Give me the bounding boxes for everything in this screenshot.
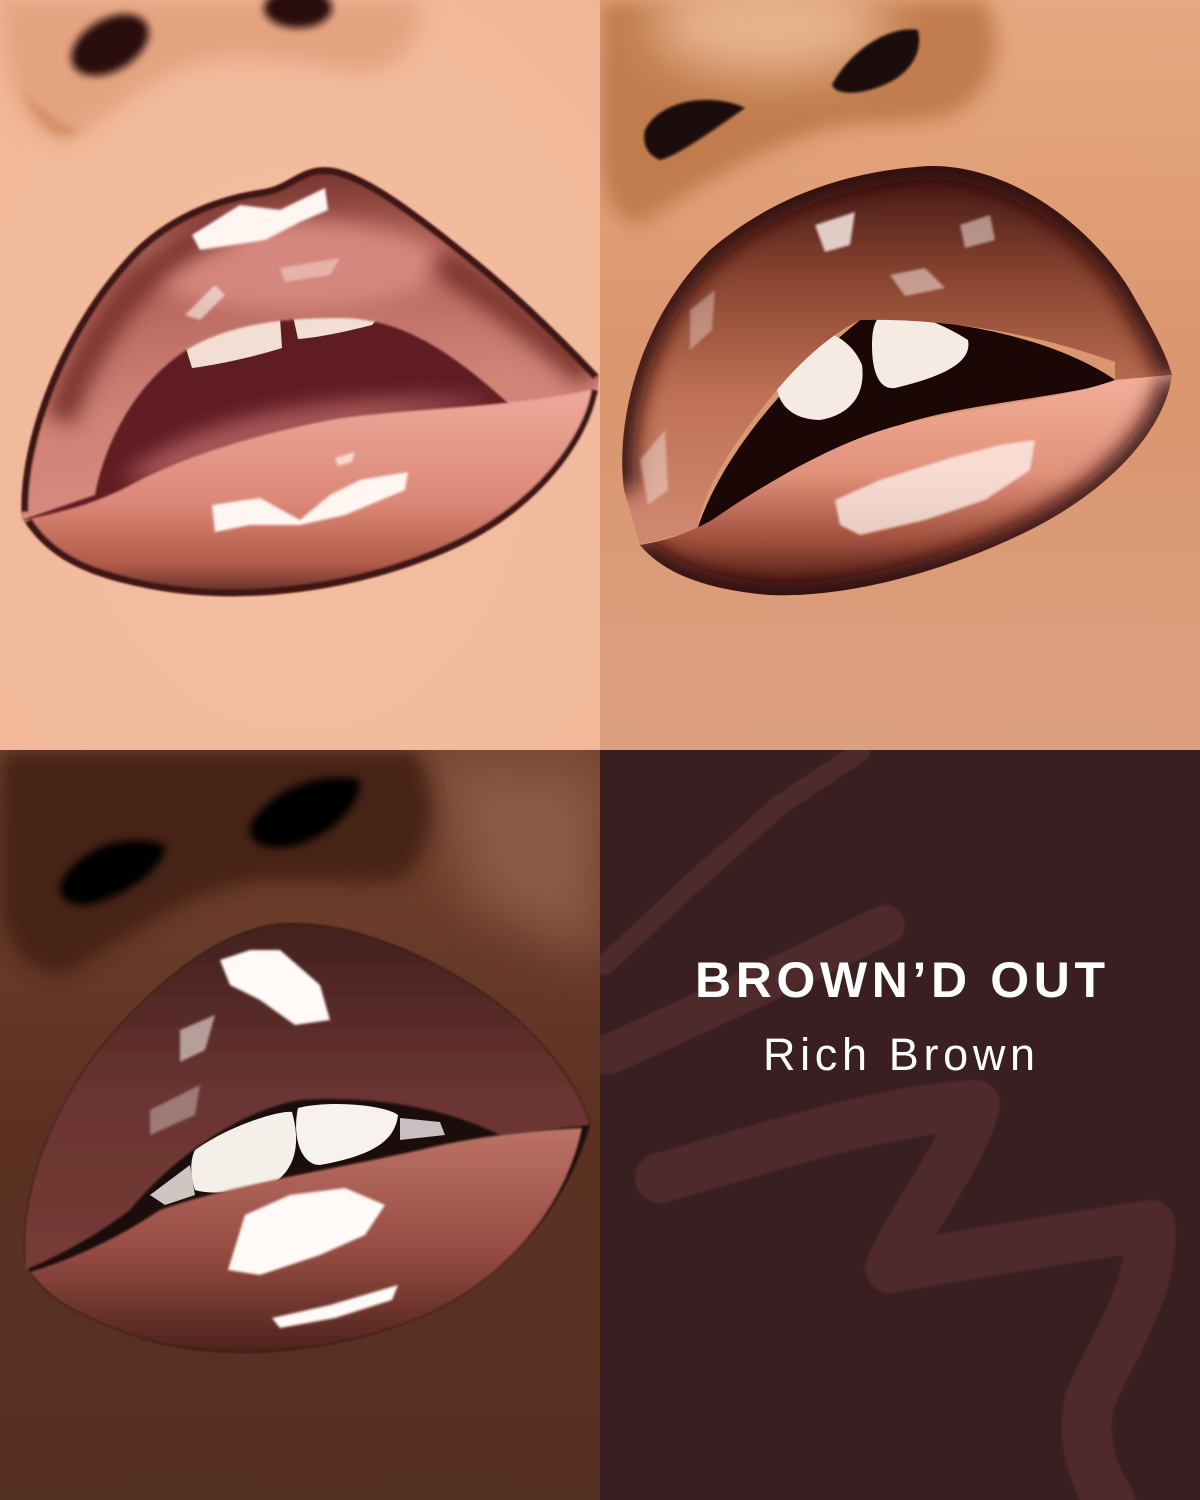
mouth backing <box>25 924 590 1352</box>
lower lip <box>24 388 598 596</box>
nose <box>0 0 420 140</box>
nose <box>0 750 432 975</box>
skin background <box>0 0 600 750</box>
upper lip <box>622 166 1172 545</box>
pencil swatch scribble <box>605 752 1150 1500</box>
panel: colour swatch with product name <box>600 750 1200 1500</box>
swatch background <box>600 750 1200 1500</box>
skin background <box>600 0 1200 750</box>
panel: light skin tone lips photo <box>0 0 600 750</box>
panel: medium skin tone lips photo <box>600 0 1200 750</box>
teeth <box>186 316 376 368</box>
product name: BROWN’D OUT <box>695 952 1105 1008</box>
nose <box>600 0 996 225</box>
shade description: Rich Brown <box>763 1029 1035 1080</box>
mouth backing <box>22 168 598 596</box>
gloss highlights <box>185 188 408 532</box>
upper lip <box>25 924 590 1270</box>
upper lip <box>22 168 598 520</box>
lower lip <box>640 375 1172 595</box>
teeth <box>150 1104 445 1205</box>
tongue <box>120 398 500 480</box>
gloss highlights <box>150 950 398 1328</box>
lower lip <box>30 1128 582 1352</box>
skin background <box>0 750 600 1500</box>
gloss highlights <box>640 212 1035 535</box>
mouth backing <box>697 319 1118 530</box>
panel: deep skin tone lips photo <box>0 750 600 1500</box>
teeth <box>777 312 968 420</box>
